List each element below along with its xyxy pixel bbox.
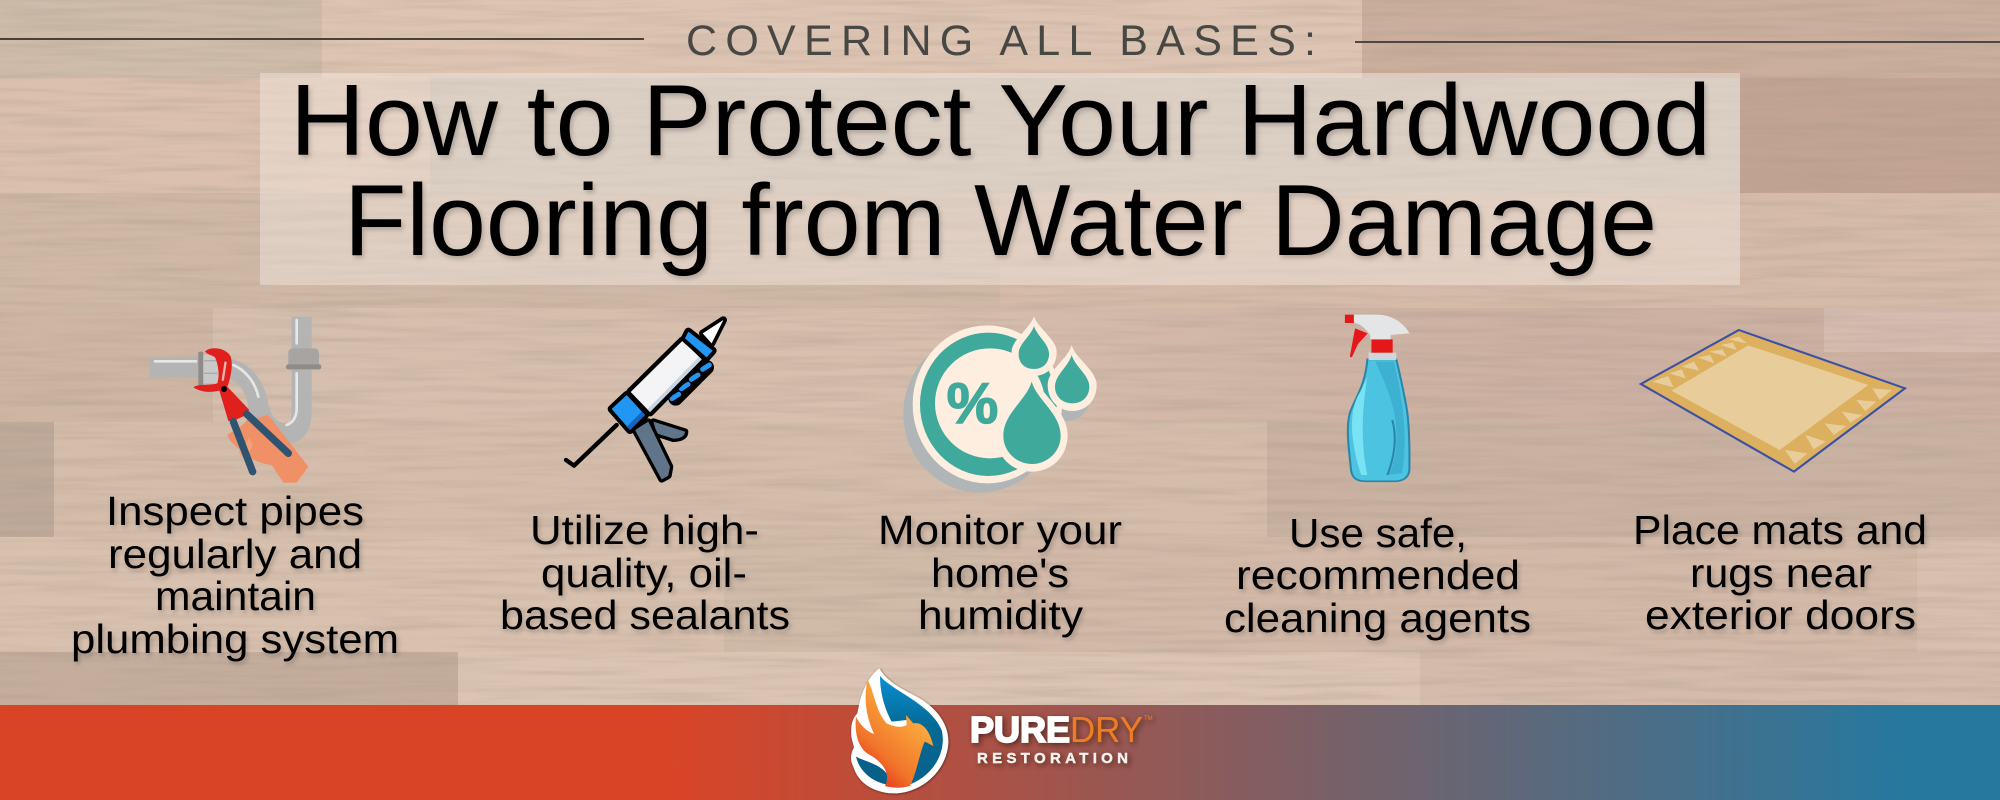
step 1: inspect pipes [71, 317, 399, 662]
label: sealants: quality, oil- [541, 550, 747, 596]
label: mats and rugs: rugs near [1690, 550, 1872, 596]
label: inspect pipes: regularly and [108, 531, 362, 577]
label: inspect pipes: Inspect pipes [106, 488, 364, 534]
label: cleaning agents [1224, 510, 1531, 641]
label: inspect pipes: plumbing system [71, 616, 399, 662]
label: mats and rugs [1633, 507, 1927, 638]
logo [851, 668, 1153, 793]
wordmark: PURE [970, 709, 1070, 750]
icon: pipe and wrench [149, 317, 321, 483]
icon: caulk gun [566, 320, 723, 479]
icon: spray bottle [1345, 315, 1409, 481]
heading rule right [1355, 41, 2000, 43]
label: sealants: based sealants [500, 592, 790, 638]
label: humidity: humidity [918, 592, 1084, 638]
icon: rug [1641, 330, 1905, 472]
footer gradient bar [0, 705, 2000, 800]
label: mats and rugs: exterior doors [1645, 592, 1916, 638]
wordmark: TM [1144, 716, 1153, 722]
label: cleaning agents: recommended [1236, 552, 1520, 598]
title panel [260, 73, 1740, 285]
wordmark [970, 709, 1153, 767]
label: sealants: Utilize high- [530, 507, 759, 553]
heading rule left [0, 38, 644, 40]
label: inspect pipes: maintain [155, 573, 316, 619]
label: humidity [878, 507, 1122, 638]
label: humidity: Monitor your [878, 507, 1122, 553]
title: Flooring from Water Damage [344, 165, 1657, 277]
wordmark: DRY [1070, 709, 1143, 750]
icon: humidity gauge with drops: % [947, 372, 998, 436]
step 2: sealants [500, 320, 790, 638]
label: mats and rugs: Place mats and [1633, 507, 1927, 553]
step 3: humidity [878, 317, 1122, 638]
step 4: cleaning agents [1224, 315, 1531, 641]
label: sealants [500, 507, 790, 638]
title [290, 65, 1711, 277]
label: cleaning agents: cleaning agents [1224, 595, 1531, 641]
label: cleaning agents: Use safe, [1289, 510, 1467, 556]
wordmark: RESTORATION [977, 750, 1128, 767]
step 5: mats and rugs [1633, 330, 1927, 638]
title: How to Protect Your Hardwood [290, 65, 1711, 177]
label: inspect pipes [71, 488, 399, 662]
icon: phoenix water drop [851, 668, 948, 793]
label: humidity: home's [931, 550, 1069, 596]
subtitle: COVERING ALL BASES: [686, 17, 1316, 65]
icon: humidity gauge with drops [903, 317, 1097, 493]
